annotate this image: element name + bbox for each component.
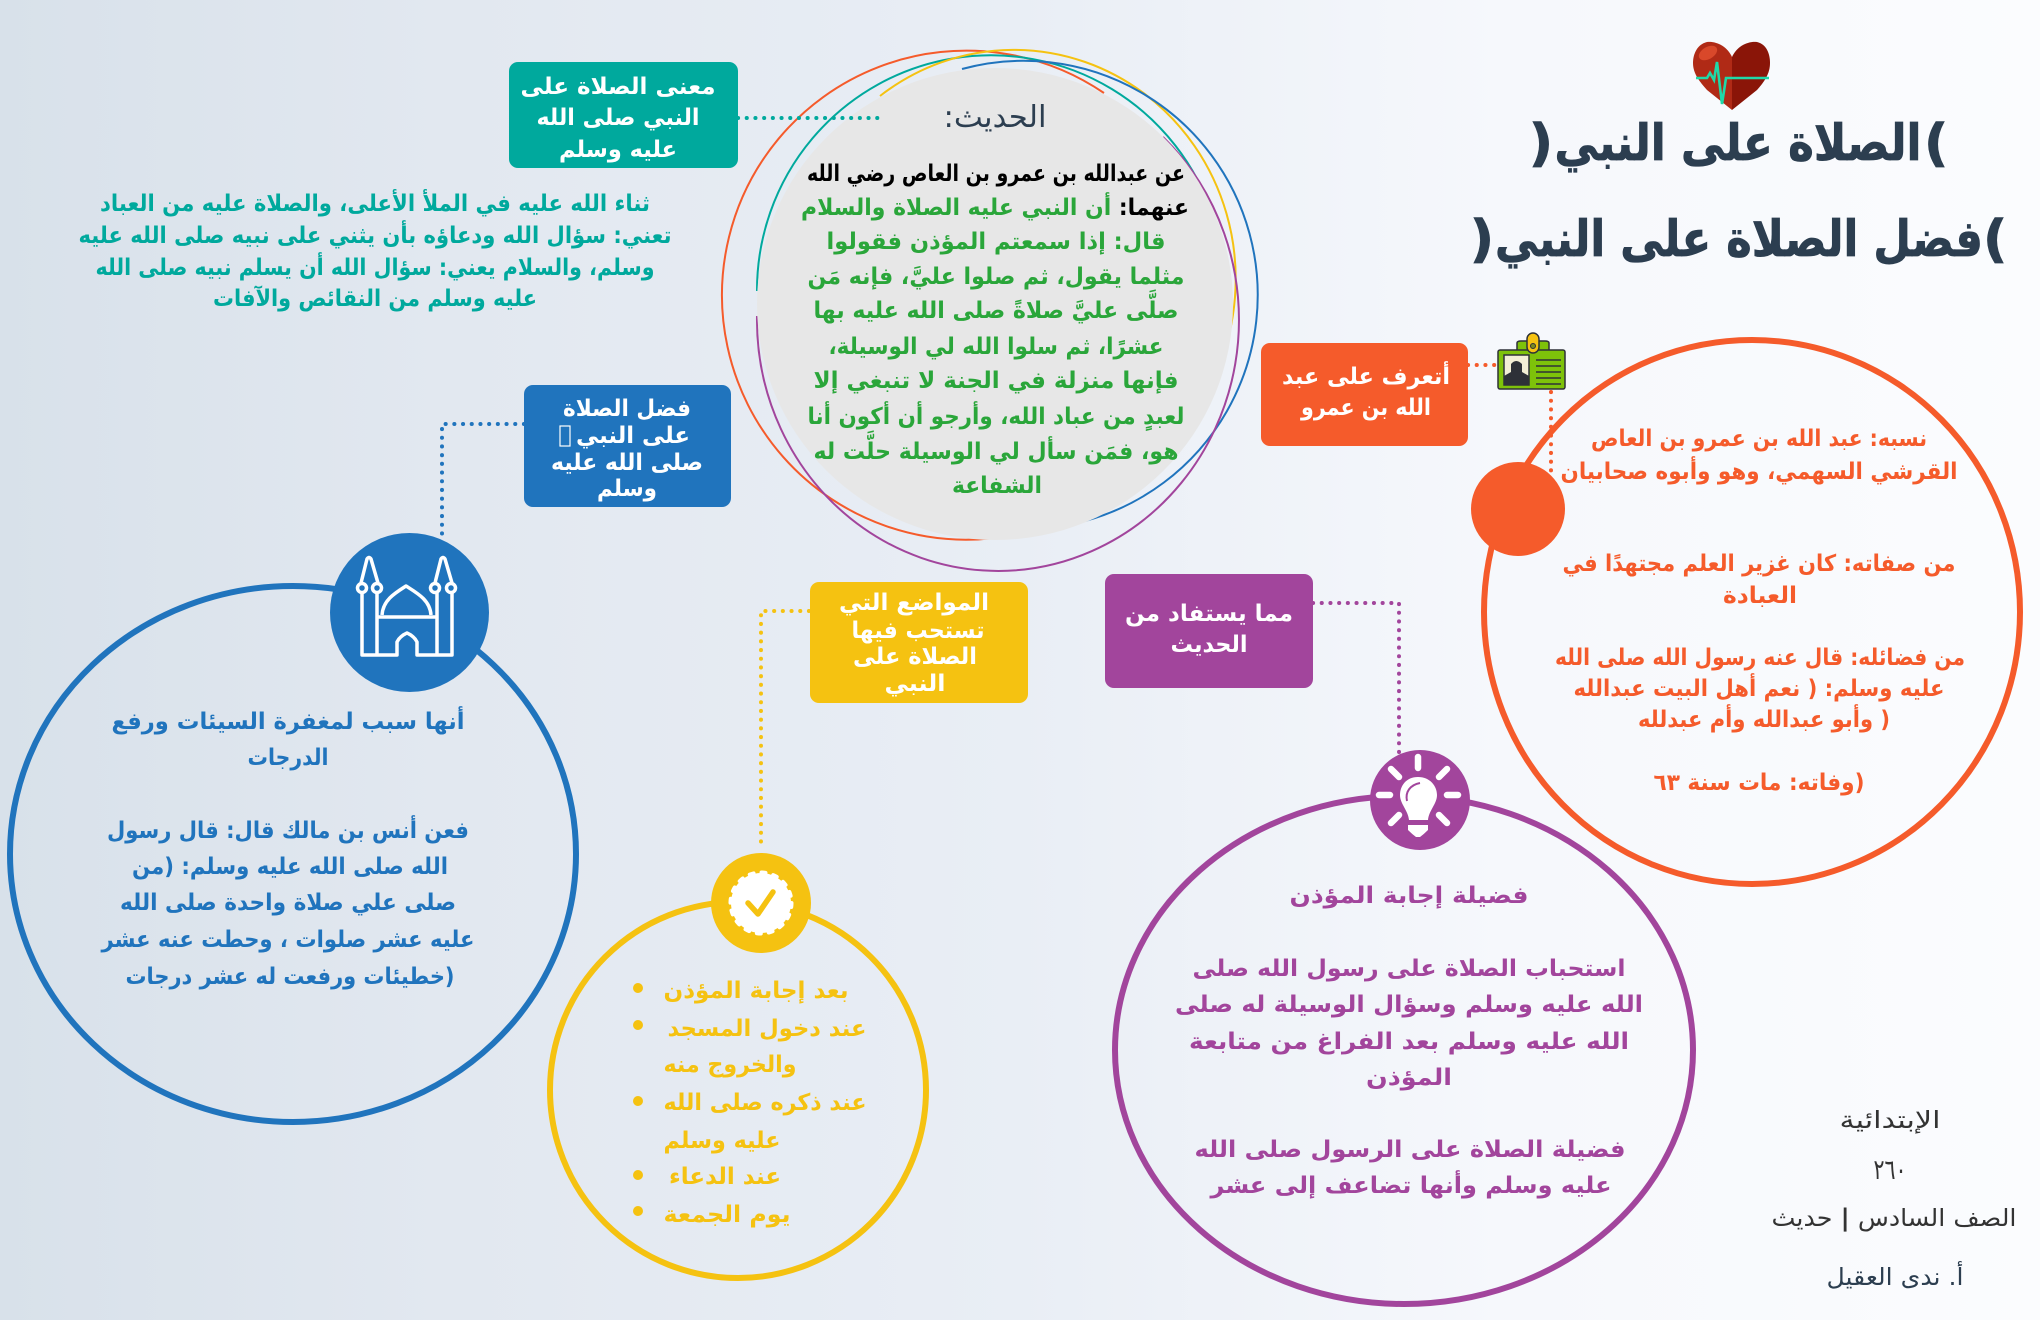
box: meaning of salah on the prophet: النبي صلى الله xyxy=(536,105,700,131)
panel: blue circle xyxy=(10,586,576,1122)
text block: orange circle: من صفاته: كان غزير العلم مجتهدًا في xyxy=(1562,551,1956,577)
footer credits: أ. ندى العقيل xyxy=(1826,1261,1964,1291)
box: lessons from the hadith: الحديث xyxy=(1170,632,1248,658)
text block: blue circle: عليه عشر صلوات ، وحطت عنه عشر xyxy=(101,927,475,953)
text block: meaning explanation: تعني: سؤال الله ودعاؤه بأن يثني على نبيه صلى الله عليه xyxy=(78,219,672,249)
text block: meaning explanation: وسلم، والسلام يعني: سؤال الله أن يسلم نبيه صلى الله xyxy=(96,251,654,281)
text block: orange circle: العبادة xyxy=(1723,583,1797,609)
icon: heart with pulse xyxy=(1693,42,1770,110)
text block: purple circle: استحباب الصلاة على رسول الله صلى xyxy=(1192,956,1626,982)
text block: blue circle: فعن أنس بن مالك قال: قال رسول xyxy=(107,814,469,844)
hadith circle with rings xyxy=(722,50,1258,571)
text block: yellow list xyxy=(633,978,866,1228)
footer credits: الإبتدائية xyxy=(1840,1106,1940,1134)
title xyxy=(1471,114,2006,268)
text block: meaning explanation: عليه وسلم من النقائص والآفات xyxy=(213,285,537,312)
text block: orange circle: القرشي السهمي، وهو وأبوه صحابيان xyxy=(1560,455,1958,485)
text block: yellow list: يوم الجمعة xyxy=(664,1202,790,1228)
text block: blue circle: (خطيئات ورفعت له عشر درجات xyxy=(126,964,454,990)
box: virtue of salah: وسلم xyxy=(597,476,657,502)
text block: orange circle: ( وأبو عبدالله وأم عبدلله xyxy=(1638,703,1890,733)
box: occasions for salah: تستحب فيها xyxy=(852,618,984,644)
hadith text: عن عبدالله بن عمرو بن العاص رضي الله xyxy=(807,161,1185,187)
text block: orange circle: نسبه: عبد الله بن عمرو بن العاص xyxy=(1591,426,1927,452)
panel: purple circle xyxy=(1115,796,1693,1304)
hadith heading: الحديث: xyxy=(944,100,1046,135)
box: lessons from the hadith: مما يستفاد من xyxy=(1125,601,1293,627)
box: biography of Abdullah xyxy=(1261,343,1468,446)
text block: meaning explanation: ثناء الله عليه في الملأ الأعلى، والصلاة عليه من العباد xyxy=(100,188,650,217)
hadith text: فإنها منزلة في الجنة لا تنبغي إلا xyxy=(814,368,1178,394)
box: occasions for salah xyxy=(810,582,1028,703)
hadith text: هو، فمَن سأل لي الوسيلة حلَّت له xyxy=(814,430,1178,465)
text block: purple circle: فضيلة الصلاة على الرسول صلى الله xyxy=(1194,1137,1626,1163)
text block: yellow list: عليه وسلم xyxy=(664,1128,780,1154)
title: الصلاة على النبي xyxy=(1554,114,1922,172)
icon: light bulb badge xyxy=(1370,750,1470,850)
box: occasions for salah: الصلاة على xyxy=(853,644,977,670)
box: biography of Abdullah: الله بن عمرو xyxy=(1300,395,1431,421)
text block: orange circle: (وفاته: مات سنة ٦٣ xyxy=(1654,770,1864,796)
text block: yellow list: عند الدعاء xyxy=(669,1164,781,1190)
icon: mosque badge xyxy=(330,533,489,692)
hadith text: قال: إذا سمعتم المؤذن فقولوا xyxy=(826,229,1166,255)
text block: blue circle: الدرجات xyxy=(248,745,328,771)
connector: meaning box to hadith xyxy=(738,116,882,120)
connector: id card to orange badge xyxy=(1549,392,1553,478)
text block: purple circle: الله عليه وسلم وسؤال الوسيلة له صلى xyxy=(1175,992,1643,1018)
text block: blue circle: الله صلى الله عليه وسلم: (من xyxy=(132,854,448,880)
hadith text: لعبدٍ من عباد الله، وأرجو أن أكون أنا xyxy=(808,400,1184,432)
title: ( xyxy=(1984,210,2006,268)
connector: virtue box to mosque badge xyxy=(442,424,524,540)
text block: purple circle: فضيلة إجابة المؤذن xyxy=(1290,883,1528,909)
footer credits: الصف السادس | حديث xyxy=(1772,1204,2016,1232)
title: ( xyxy=(1925,114,1947,172)
text block: purple circle: المؤذن xyxy=(1366,1065,1452,1091)
hadith text: عنهما: أن النبي عليه الصلاة والسلام xyxy=(801,191,1189,221)
footer credits xyxy=(1772,1106,2016,1291)
panel: orange circle xyxy=(1484,340,2020,884)
orange badge dot xyxy=(1471,462,1565,556)
box: meaning of salah on the prophet: معنى الصلاة على xyxy=(520,74,716,100)
connector: lessons box to bulb badge xyxy=(1313,603,1399,755)
text block: blue circle xyxy=(101,705,475,990)
connector: biography box to id card xyxy=(1468,363,1497,367)
text block: orange circle xyxy=(1555,426,1965,796)
hadith text: مثلما يقول، ثم صلوا عليَّ، فإنه مَن xyxy=(808,264,1184,290)
hadith text: الشفاعة xyxy=(952,473,1042,499)
box: meaning of salah on the prophet xyxy=(509,62,738,168)
text block: purple circle: الله عليه وسلم بعد الفراغ من متابعة xyxy=(1189,1029,1629,1055)
box: meaning of salah on the prophet: عليه وسلم xyxy=(559,137,677,163)
icon: id card xyxy=(1498,333,1565,389)
text block: purple circle xyxy=(1175,883,1643,1199)
text block: orange circle: من فضائله: قال عنه رسول الله صلى الله xyxy=(1555,645,1965,671)
panel: yellow circle xyxy=(550,902,926,1278)
text block: blue circle: أنها سبب لمغفرة السيئات ورفع xyxy=(112,705,464,735)
icon: check badge xyxy=(711,853,811,953)
hadith text xyxy=(801,161,1189,499)
title: ) xyxy=(1471,210,1493,268)
footer credits: ٢٦٠ xyxy=(1874,1153,1906,1186)
box: lessons from the hadith xyxy=(1105,574,1313,688)
text block: yellow list: والخروج منه xyxy=(664,1052,796,1078)
box: occasions for salah: النبي xyxy=(884,671,946,697)
text block: yellow list: عند دخول المسجد xyxy=(668,1016,866,1042)
hadith text: صلَّى عليَّ صلاةً صلى الله عليه بها xyxy=(814,289,1178,324)
connector: occasions box to check badge xyxy=(761,611,809,850)
box: virtue of salah: فضل الصلاة xyxy=(563,396,691,422)
text block: purple circle: عليه وسلم وأنها تضاعف إلى عشر xyxy=(1209,1169,1612,1199)
text block: yellow list: عند ذكره صلى الله xyxy=(664,1090,866,1116)
text block: blue circle: صلى علي صلاة واحدة صلى الله xyxy=(120,890,456,916)
hadith text: عشرًا، ثم سلوا الله لي الوسيلة، xyxy=(828,334,1164,360)
box: virtue of salah: على النبي xyxy=(576,423,690,449)
text block: orange circle: عليه وسلم: ( نعم أهل البيت عبدالله xyxy=(1574,672,1944,702)
text block: yellow list: بعد إجابة المؤذن xyxy=(664,978,848,1004)
box: virtue of salah xyxy=(524,385,731,507)
box: biography of Abdullah: أتعرف على عبد xyxy=(1282,360,1450,390)
box: virtue of salah: صلى الله عليه xyxy=(551,450,703,476)
box: occasions for salah: المواضع التي xyxy=(839,590,989,616)
text block: meaning explanation xyxy=(78,188,672,312)
title: ) xyxy=(1530,114,1552,172)
